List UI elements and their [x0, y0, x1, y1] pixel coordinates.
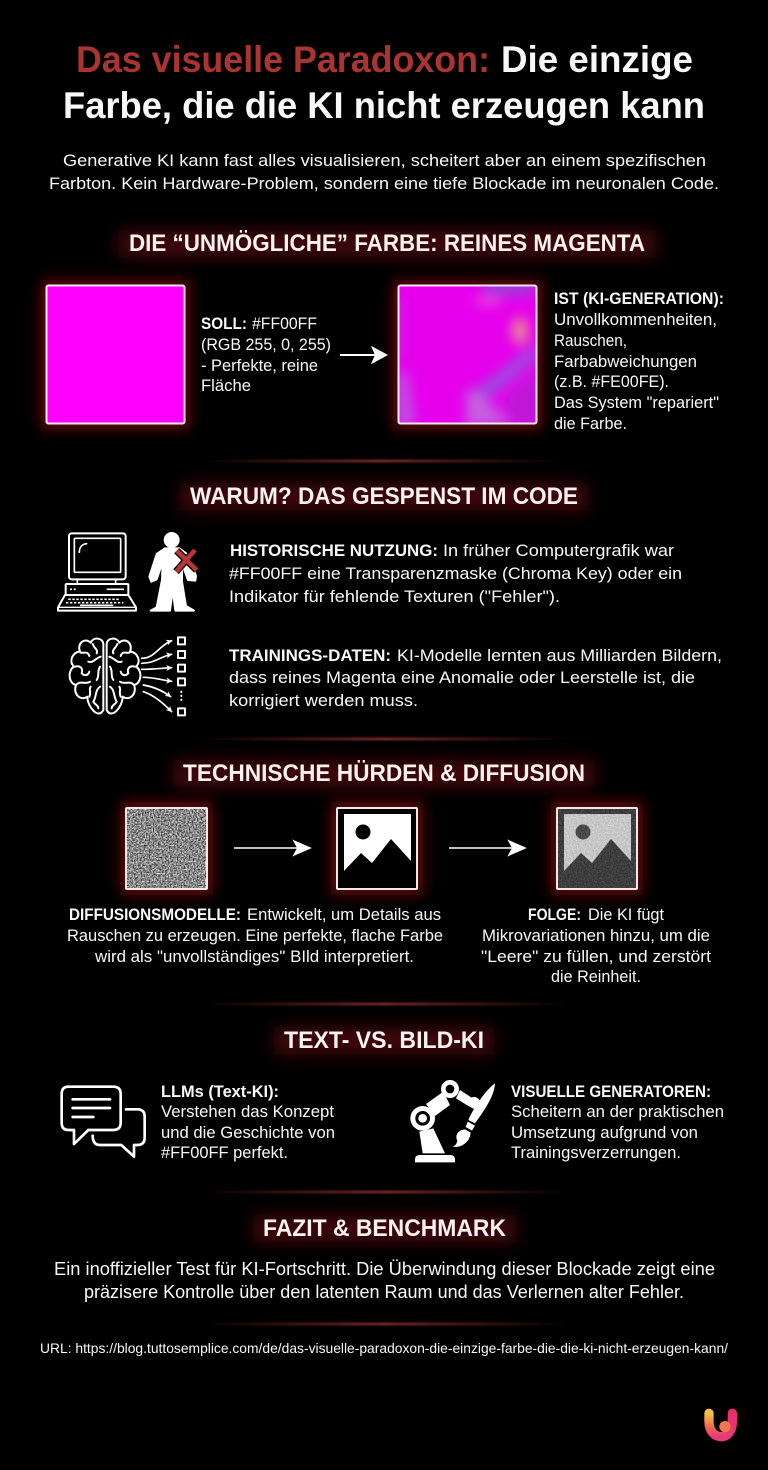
text: visual generators: VISUELLE GENERATOREN: — [511, 1082, 711, 1101]
text: conclusion — [54, 1259, 715, 1302]
text: generated colour: Rauschen, — [554, 331, 627, 350]
text: conclusion: Ein inoffizieller Test für KI-Fortschritt. Die Überwindung dieser Blockade zeigt eine — [54, 1259, 715, 1279]
text: visual generators: Scheitern an der praktischen — [511, 1102, 724, 1121]
text: generated colour: Das System "repariert" — [554, 393, 719, 412]
panel: target colour swatch — [41, 280, 190, 429]
panel: noise image — [121, 802, 213, 895]
text: LLMs: #FF00FF perfekt. — [161, 1143, 288, 1162]
text: training data: KI-Modelle lernten aus Milliarden Bildern, — [397, 646, 722, 665]
text: generated colour — [554, 289, 724, 433]
icon: person with red cross — [149, 532, 197, 611]
text: historic use — [229, 541, 682, 606]
icon: chat bubbles — [62, 1087, 145, 1157]
text: visual generators: Umsetzung aufgrund von — [511, 1123, 698, 1142]
arrow: image to noisy image — [449, 841, 525, 855]
text: target colour: SOLL: — [201, 314, 247, 333]
panel: clean image icon — [331, 802, 423, 895]
text: generated colour: die Farbe. — [554, 414, 627, 433]
text: LLMs: LLMs (Text-KI): — [161, 1082, 279, 1101]
text: conclusion: präzisere Kontrolle über den latenten Raum und das Verlernen alter Fehler. — [84, 1282, 684, 1302]
text: consequence: Mikrovariationen hinzu, um die — [482, 926, 710, 945]
icon: brain with output arrows — [70, 637, 185, 715]
title: Das visuelle Paradoxon: — [76, 39, 490, 80]
text: diffusion models: Entwickelt, um Details aus — [247, 905, 441, 924]
text: consequence: die Reinheit. — [551, 967, 641, 986]
text: target colour: #FF00FF — [252, 314, 317, 333]
heading: conclusion: FAZIT & BENCHMARK — [263, 1215, 507, 1242]
text: training data: TRAININGS-DATEN: — [229, 646, 391, 665]
text: generated colour: (z.B. #FE00FE). — [554, 372, 669, 391]
icon: logo — [709, 1413, 732, 1437]
text: generated colour: IST (KI-GENERATION): — [554, 289, 724, 308]
text: diffusion models: Rauschen zu erzeugen. Eine perfekte, flache Farbe — [67, 926, 443, 945]
intro text: Farbton. Kein Hardware-Problem, sondern eine tiefe Blockade im neuronalen Code. — [49, 174, 719, 193]
source url: URL: https://blog.tuttosemplice.com/de/das-visuelle-paradoxon-die-einzige-farbe-die-die-ki-nicht-erzeugen-kann/ — [40, 1340, 728, 1356]
text: training data: korrigiert werden muss. — [229, 691, 418, 710]
text: diffusion models: DIFFUSIONSMODELLE: — [69, 905, 241, 924]
text: generated colour: Unvollkommenheiten, — [554, 310, 717, 329]
icon: robot arm with brush — [410, 1080, 495, 1162]
text: diffusion models — [67, 905, 443, 966]
text: diffusion models: wird als "unvollständiges" BIld interpretiert. — [94, 947, 414, 966]
heading: impossible colour: DIE “UNMÖGLICHE” FARBE: REINES MAGENTA — [129, 230, 645, 257]
text: historic use: In früher Computergrafik war — [443, 541, 674, 560]
text: historic use: HISTORISCHE NUTZUNG: — [230, 541, 438, 560]
text: visual generators — [511, 1082, 724, 1162]
title — [63, 39, 705, 126]
text: LLMs: und die Geschichte von — [161, 1123, 335, 1142]
panel: generated colour swatch — [393, 280, 542, 429]
title: Die einzige — [501, 39, 693, 80]
text: target colour: (RGB 255, 0, 255) — [201, 335, 331, 354]
text: generated colour: Farbabweichungen — [554, 352, 697, 371]
text: historic use: #FF00FF eine Transparenzmaske (Chroma Key) oder ein — [229, 564, 682, 583]
text: historic use: Indikator für fehlende Texturen ("Fehler"). — [229, 587, 560, 606]
text: consequence: Die KI fügt — [588, 905, 664, 924]
text: visual generators: Trainingsverzerrungen. — [511, 1143, 681, 1162]
text: consequence — [481, 905, 711, 986]
intro text — [49, 151, 719, 193]
text: target colour: - Perfekte, reine — [201, 356, 318, 375]
panel: degraded image icon — [551, 802, 643, 895]
text: consequence: FOLGE: — [528, 905, 581, 924]
heading: why: WARUM? DAS GESPENST IM CODE — [190, 483, 578, 510]
arrow: noise to image — [234, 841, 310, 855]
text: target colour — [201, 314, 331, 395]
text: LLMs: Verstehen das Konzept — [161, 1102, 334, 1121]
text: consequence: "Leere" zu füllen, und zerstört — [481, 947, 711, 966]
title: Farbe, die die KI nicht erzeugen kann — [63, 85, 705, 126]
text: LLMs — [161, 1082, 335, 1162]
arrow: target to generated — [340, 348, 386, 362]
icon: retro computer — [58, 533, 136, 611]
text: target colour: Fläche — [201, 376, 251, 395]
heading: technical hurdles: TECHNISCHE HÜRDEN & DIFFUSION — [183, 760, 585, 787]
intro text: Generative KI kann fast alles visualisieren, scheitert aber an einem spezifischen — [63, 151, 706, 170]
text: training data: dass reines Magenta eine Anomalie oder Leerstelle ist, die — [229, 668, 695, 687]
text: training data — [229, 646, 722, 710]
heading: text vs image AI: TEXT- VS. BILD-KI — [284, 1027, 484, 1054]
